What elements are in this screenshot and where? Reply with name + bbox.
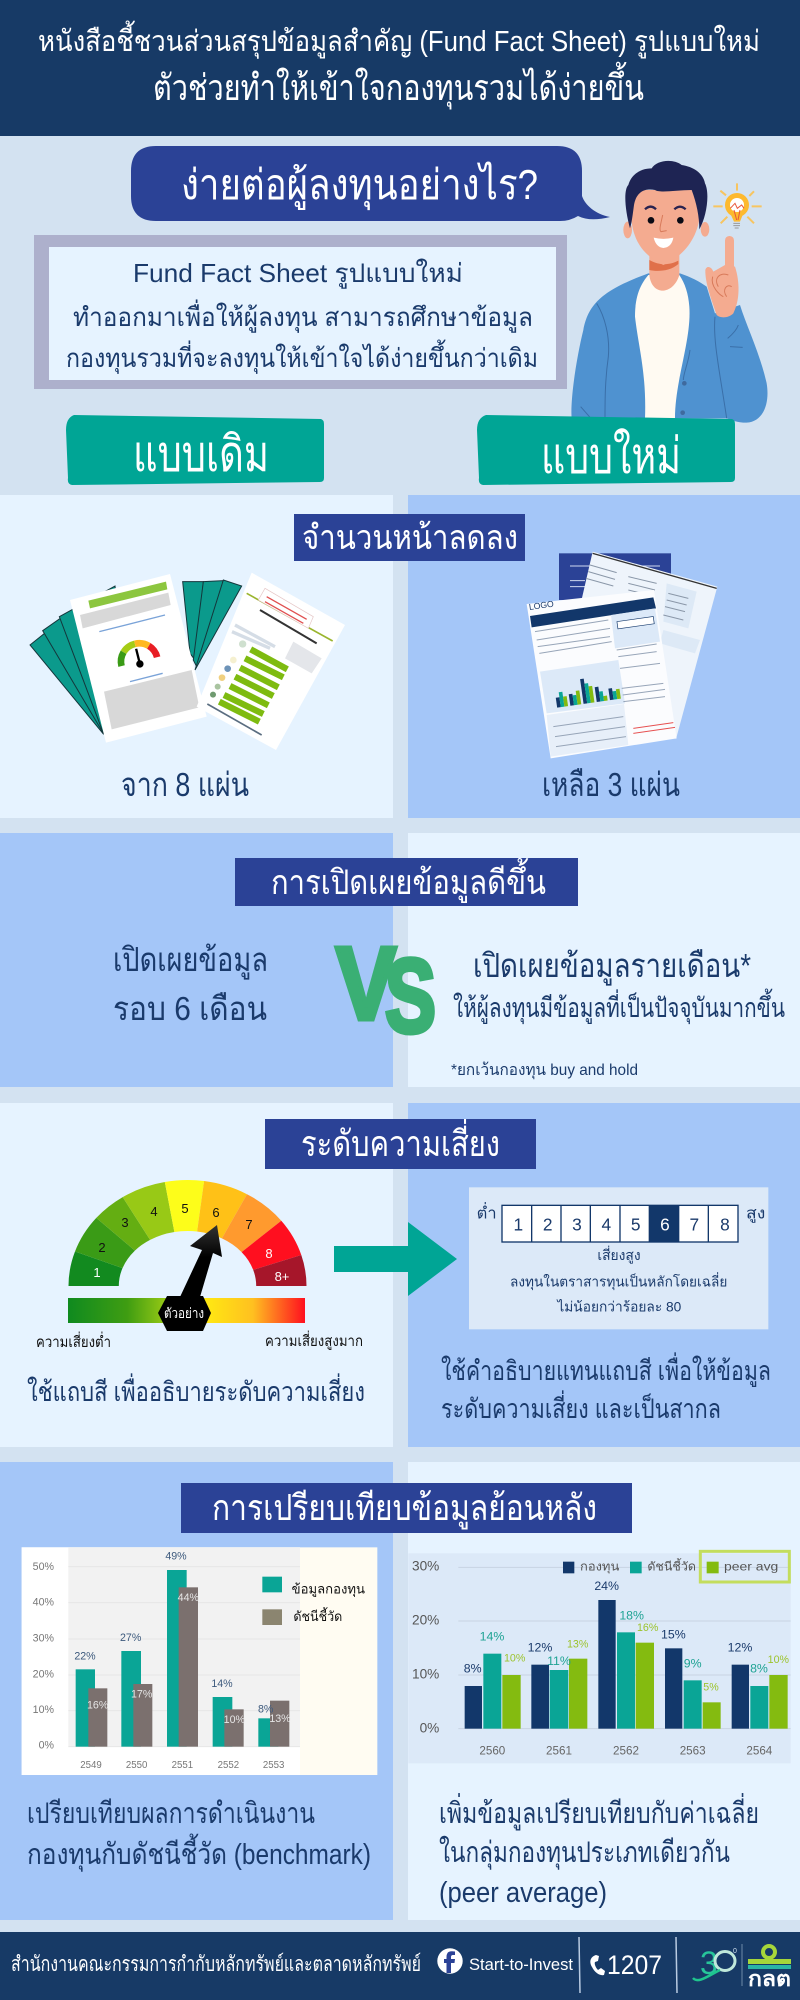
panel: disclosure new: *ยกเว้นกองทุน buy and hold — [451, 1061, 638, 1080]
header line 2: ตัวช่วยทำให้เข้าใจกองทุนรวมได้ง่ายขึ้น — [153, 61, 644, 110]
panel: disclosure old — [0, 833, 393, 1087]
panel: disclosure new — [408, 833, 800, 1087]
footer — [0, 1932, 800, 2000]
bar chart: old format: 14% — [211, 1678, 233, 1690]
bar chart: old format: 0% — [39, 1740, 55, 1752]
panel: risk level new: ระดับความเสี่ยง และเป็นสากล — [441, 1390, 721, 1424]
intro text box: กองทุนรวมที่จะลงทุนให้เข้าใจได้ง่ายขึ้นกว่าเดิม — [66, 339, 538, 374]
risk gauge: 8+ — [275, 1269, 289, 1284]
bar chart: old format — [22, 1547, 377, 1775]
bar chart: new format: 16% — [637, 1622, 659, 1634]
risk gauge: 8 — [265, 1246, 273, 1261]
bar chart: new format: 10% — [504, 1653, 526, 1665]
bar chart: new format: 9% — [684, 1657, 702, 1671]
risk scale card: 2 — [543, 1215, 552, 1235]
heading: page count reduced: จำนวนหน้าลดลง — [302, 519, 518, 557]
illustration: new 3-page fact sheet — [527, 552, 717, 758]
bar chart: new format: 8% — [464, 1662, 482, 1676]
bar chart: new format: 5% — [703, 1681, 719, 1693]
logo: 30th anniversary: 0 — [733, 1948, 737, 1955]
risk gauge: 6 — [212, 1205, 220, 1220]
risk scale card: สูง — [746, 1205, 765, 1223]
bar chart: old format: 40% — [33, 1597, 55, 1609]
risk gauge: 4 — [150, 1204, 158, 1219]
bar chart: old format: 49% — [165, 1550, 187, 1562]
risk scale card: ไม่น้อยกว่าร้อยละ 80 — [556, 1299, 682, 1315]
footer: Start-to-Invest — [469, 1955, 573, 1974]
caption: down to 3 pages: เหลือ 3 แผ่น — [542, 766, 680, 803]
VS mark: V — [336, 926, 396, 1041]
bar chart: old format: 8% — [258, 1704, 274, 1716]
risk scale card: 1 — [514, 1215, 523, 1235]
bar chart: old format: 17% — [131, 1689, 153, 1701]
bar chart: new format: 18% — [619, 1608, 644, 1622]
risk gauge: 3 — [121, 1215, 129, 1230]
header banner — [0, 0, 800, 136]
icon: phone — [590, 1955, 605, 1975]
bar chart: new format: 20% — [412, 1612, 439, 1627]
panel: back-data comparison old: กองทุนกับดัชนีชี้วัด (benchmark) — [27, 1833, 371, 1872]
bar chart: old format: 10% — [33, 1704, 55, 1716]
risk scale card: ต่ำ — [477, 1201, 497, 1222]
bar chart: new format: 11% — [547, 1654, 571, 1668]
caption: from 8 pages: จาก 8 แผ่น — [121, 766, 249, 803]
risk gauge: ตัวอย่าง — [164, 1305, 204, 1321]
bar chart: old format: 2553 — [263, 1760, 284, 1771]
panel: disclosure old: เปิดเผยข้อมูล — [113, 941, 268, 980]
panel: page count old — [0, 495, 393, 818]
speech bubble — [131, 146, 610, 221]
risk gauge: 7 — [245, 1217, 253, 1232]
bar chart: old format: 27% — [120, 1632, 142, 1644]
risk gauge: 1 — [93, 1265, 101, 1280]
risk scale card — [469, 1187, 768, 1329]
bar chart: new format: 2563 — [680, 1745, 706, 1758]
legend: กองทุน — [580, 1560, 619, 1575]
bar chart: old format: 10% — [224, 1714, 246, 1726]
bar chart: new format: 24% — [594, 1579, 619, 1593]
risk gauge: ความเสี่ยงสูงมาก — [265, 1330, 363, 1350]
legend: ข้อมูลกองทุน — [292, 1581, 365, 1597]
label: old format — [66, 415, 324, 485]
arrow: old to new — [334, 1222, 457, 1296]
bar chart: new format: 2560 — [479, 1745, 506, 1758]
heading: better disclosure: การเปิดเผยข้อมูลดีขึ้น — [271, 858, 546, 903]
bar chart: new format: 30% — [412, 1559, 439, 1574]
bar chart: old format: 44% — [178, 1592, 200, 1604]
bar chart: old format: 13% — [269, 1713, 291, 1725]
bar chart: new format: 8% — [750, 1662, 768, 1676]
bar chart: old format: 22% — [74, 1650, 96, 1662]
VS mark: S — [385, 938, 436, 1055]
risk scale card: 3 — [572, 1215, 582, 1235]
icon: light bulb — [713, 183, 762, 228]
bar chart: old format: 50% — [33, 1561, 55, 1573]
heading: back-data comparison: การเปรียบเทียบข้อมูลย้อนหลัง — [212, 1487, 597, 1530]
logo: 30th anniversary: 3 — [700, 1945, 718, 1981]
legend: peer avg — [724, 1560, 778, 1574]
panel: back-data comparison new: (peer average) — [439, 1877, 607, 1909]
panel: back-data comparison old — [0, 1462, 393, 1920]
risk gauge: ความเสี่ยงต่ำ — [36, 1331, 111, 1351]
bar chart: old format: 30% — [33, 1632, 55, 1644]
panel: disclosure old: รอบ 6 เดือน — [113, 990, 267, 1027]
bar chart: old format: 2552 — [218, 1760, 239, 1771]
intro text box: ทำออกมาเพื่อให้ผู้ลงทุน สามารถศึกษาข้อมูล — [73, 299, 533, 333]
risk scale card: 5 — [631, 1215, 640, 1235]
bar chart: old format: 2549 — [80, 1760, 102, 1771]
label: new format — [477, 415, 735, 485]
intro text box: Fund Fact Sheet รูปแบบใหม่ — [133, 258, 463, 289]
risk scale card: ลงทุนในตราสารทุนเป็นหลักโดยเฉลี่ย — [510, 1273, 727, 1291]
heading: risk level: ระดับความเสี่ยง — [301, 1119, 500, 1164]
risk scale card: 7 — [690, 1215, 699, 1235]
panel: risk level new — [408, 1103, 800, 1447]
bar chart: old format: 2551 — [172, 1760, 193, 1771]
bar chart: new format: 13% — [567, 1638, 589, 1650]
organisation name: สำนักงานคณะกรรมการกำกับหลักทรัพย์และตลาดหลักทรัพย์ — [11, 1952, 421, 1976]
icon: facebook — [437, 1948, 463, 1974]
legend — [563, 1551, 789, 1582]
panel: back-data comparison new — [408, 1462, 800, 1920]
risk scale card: 4 — [602, 1215, 612, 1235]
panel: disclosure new: เปิดเผยข้อมูลรายเดือน* — [473, 947, 751, 986]
logo: 30th anniversary — [693, 1944, 742, 1986]
intro text box — [34, 235, 567, 389]
bar chart: new format: 12% — [528, 1641, 552, 1655]
speech bubble: ง่ายต่อผู้ลงทุนอย่างไร? — [181, 161, 538, 211]
logo: SEC — [748, 1946, 791, 1991]
bar chart: old format: 20% — [33, 1668, 55, 1680]
bar chart: new format — [408, 1551, 791, 1763]
bar chart: new format: 2561 — [546, 1745, 572, 1758]
legend: ดัชนีชี้วัด — [647, 1558, 696, 1574]
bar chart: new format: 15% — [661, 1627, 686, 1641]
risk scale card: 8 — [720, 1215, 730, 1235]
bar chart: new format: 14% — [480, 1629, 504, 1643]
legend — [262, 1577, 365, 1625]
heading: risk level — [265, 1119, 536, 1169]
bar chart: new format: 10% — [768, 1654, 790, 1666]
label: new format: แบบใหม่ — [541, 428, 681, 484]
risk scale card: เสี่ยงสูง — [597, 1246, 641, 1264]
label: old format: แบบเดิม — [133, 426, 269, 482]
logo: SEC: กลต — [748, 1968, 791, 1991]
bar chart: new format: 2564 — [746, 1745, 773, 1758]
footer: 1207 — [607, 1950, 662, 1980]
bar chart: new format: 10% — [412, 1666, 439, 1681]
VS mark — [336, 926, 436, 1055]
panel: page count new — [408, 495, 800, 818]
panel: risk level old: ใช้แถบสี เพื่ออธิบายระดับความเสี่ยง — [27, 1373, 365, 1407]
bar chart: old format: 2550 — [126, 1760, 147, 1771]
bar chart: old format: 16% — [87, 1700, 109, 1712]
illustration: old 8-page fact sheet — [30, 573, 345, 750]
illustration: man pointing with light bulb — [571, 161, 767, 423]
bar chart: new format: 0% — [420, 1720, 439, 1735]
risk scale card: 6 — [660, 1215, 670, 1235]
panel: risk level old — [0, 1103, 393, 1447]
illustration: new 3-page fact sheet: LOGO — [528, 599, 555, 612]
bar chart: new format: 2562 — [613, 1745, 639, 1758]
risk gauge — [36, 1180, 363, 1351]
risk gauge: 2 — [98, 1240, 106, 1255]
panel: back-data comparison old: เปรียบเทียบผลการดำเนินงาน — [27, 1798, 315, 1830]
bar chart: new format: 12% — [728, 1641, 752, 1655]
heading: better disclosure — [235, 858, 578, 906]
risk gauge: 5 — [181, 1201, 189, 1216]
legend: ดัชนีชี้วัด — [293, 1607, 342, 1624]
